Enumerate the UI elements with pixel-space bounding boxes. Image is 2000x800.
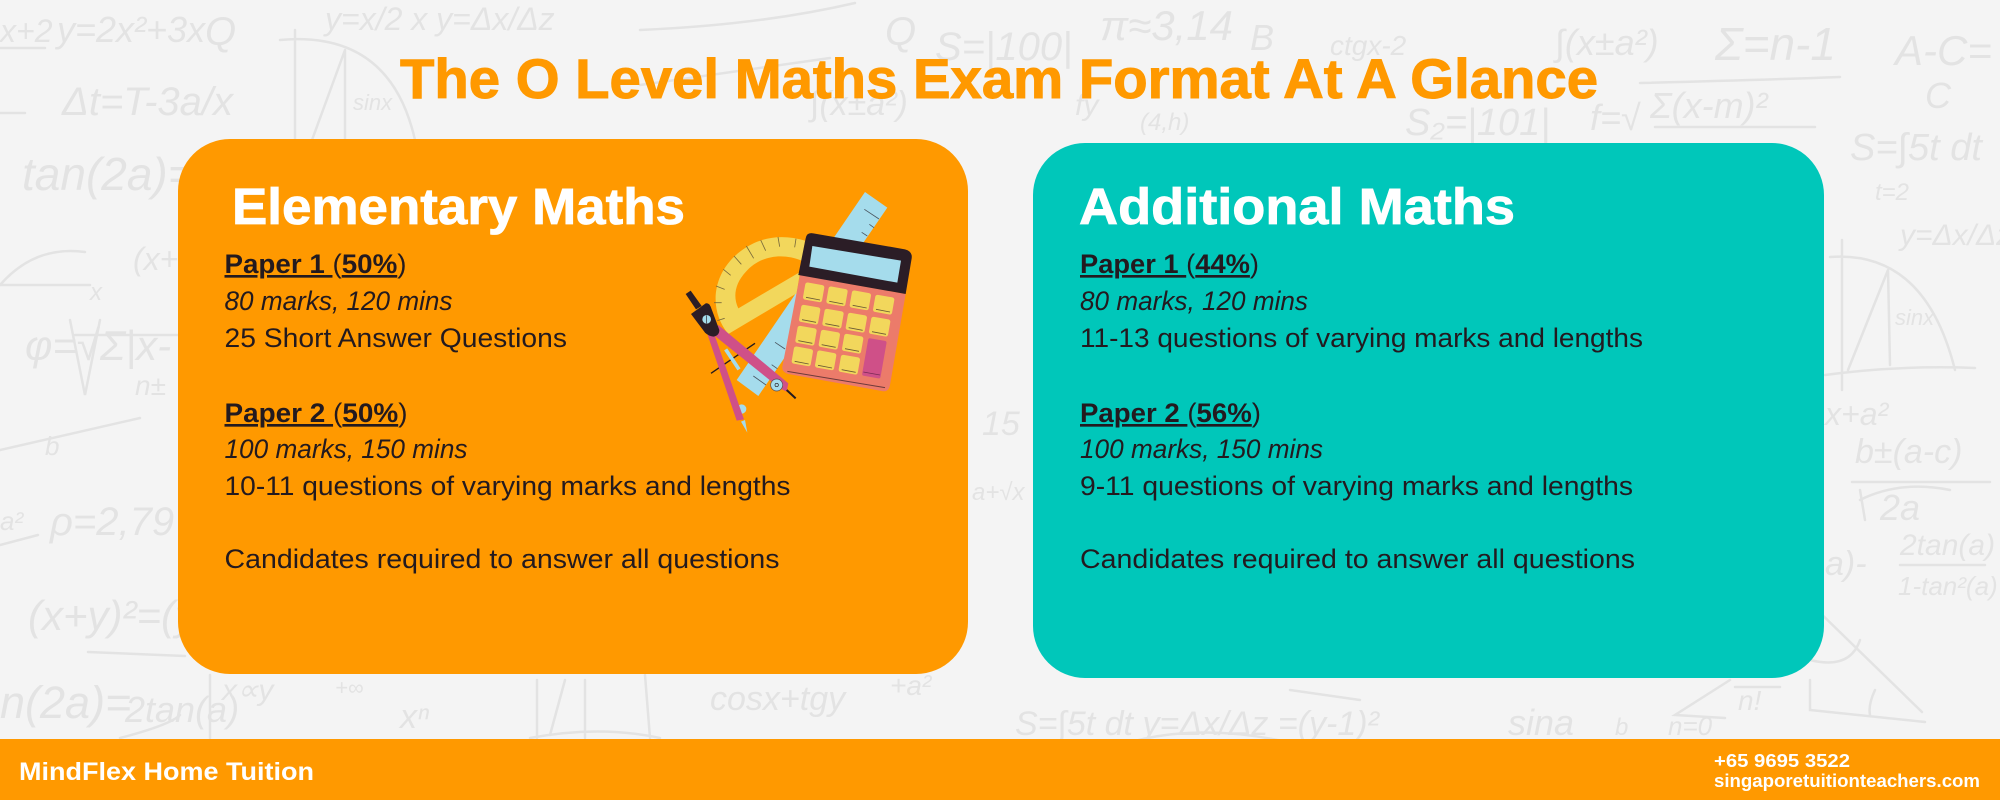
paper 1 details: 80 marks, 120 mins [1080, 286, 1308, 316]
footer website: singaporetuitionteachers.com [1714, 770, 1980, 791]
background math doodles: sina [1508, 702, 1574, 743]
background math doodles: n± [135, 370, 166, 401]
background math doodles: (4,h) [1140, 109, 1189, 136]
background math doodles: S=|100| [935, 25, 1073, 69]
background math doodles: n! [1738, 685, 1762, 716]
paper 2 details: 10-11 questions of varying marks and lengths [224, 471, 790, 501]
paper 1 details [224, 249, 567, 353]
background math doodles: A-C= [1892, 27, 1992, 74]
paper 2 details: 100 marks, 150 mins [1080, 434, 1323, 464]
footer bar [0, 739, 2000, 800]
background math doodles: +∞ [335, 675, 364, 700]
panel: additional maths [1033, 143, 1824, 678]
background math doodles: a)- [1825, 545, 1867, 583]
icon: compass [686, 291, 796, 433]
background math doodles: y=x/2 x y=Δx/Δz [323, 1, 555, 37]
background math doodles: Σ(x-m)² [1649, 85, 1770, 126]
background math doodles: π≈3,14 [1100, 2, 1233, 49]
background math doodles: S=∫5t dt [1850, 127, 1983, 169]
background math doodles: ctgx-2 [1330, 30, 1407, 61]
background math doodles: ∫(x±a²) [808, 85, 908, 123]
background math doodles: (x+y)²=(y/2 [28, 592, 231, 639]
background math doodles: 2tan(a) [124, 689, 239, 730]
background math doodles: sinx [353, 90, 393, 115]
background math doodles: B [1250, 17, 1274, 58]
paper 2 details: Paper 2 (50%) [224, 398, 408, 428]
heading: elementary maths: Elementary Maths [232, 178, 685, 235]
paper 2 details: Paper 2 (56%) [1080, 398, 1261, 428]
background math doodles: S₂=|101| [1405, 102, 1550, 144]
heading: additional maths: Additional Maths [1079, 178, 1515, 235]
background math doodles: Q [885, 10, 916, 54]
background math doodles: xⁿ [398, 698, 429, 736]
paper 2 details: 9-11 questions of varying marks and lengths [1080, 471, 1633, 501]
footer phone: +65 9695 3522 [1714, 750, 1850, 771]
background math doodles: Σ=n-1 [1714, 18, 1836, 70]
candidates note: Candidates required to answer all questions [1080, 544, 1635, 574]
background math doodles: (x+ [133, 241, 178, 277]
background math doodles: b±(a-c) [1855, 433, 1962, 471]
footer brand: MindFlex Home Tuition [19, 758, 314, 786]
paper 1 details: 80 marks, 120 mins [224, 286, 452, 316]
candidates note: Candidates required to answer all questions [224, 544, 780, 574]
icon: calculator [782, 233, 912, 391]
background math doodles: fy [1075, 89, 1100, 122]
paper 1 details: 25 Short Answer Questions [224, 323, 567, 353]
background math doodles: t=2 [1875, 179, 1909, 206]
background math doodles: n=0 [1668, 711, 1713, 741]
background math doodles: x+a² [1823, 396, 1889, 432]
paper 2 details: 100 marks, 150 mins [224, 434, 468, 464]
background math doodles: sinx [1895, 305, 1935, 330]
icon: protractor [714, 237, 805, 334]
background math doodles: 2a [1879, 487, 1920, 528]
background math doodles: +a² [890, 670, 933, 701]
title: The O Level Maths Exam Format At A Glance [400, 47, 1598, 110]
background math doodles: ∫(x±a²) [1553, 22, 1659, 63]
background math doodles: tan(2a)= [22, 148, 195, 200]
background math doodles: f=√ [1590, 97, 1641, 138]
background math doodles: cosx+tgy [710, 680, 847, 718]
background math doodles: φ=√Σ|x- [25, 322, 171, 370]
background math doodles: S=∫5t dt y=Δx/Δz =(y-1)² [1015, 705, 1381, 743]
paper 1 details [1080, 249, 1643, 353]
background math doodles: b [1615, 714, 1628, 741]
background math doodles: n(2a)= [0, 677, 131, 728]
background math doodles: Q [205, 10, 236, 54]
background math doodles: x [89, 279, 103, 306]
background math doodles: b [45, 431, 59, 461]
background math doodles: 2tan(a) [1899, 529, 1995, 562]
background math doodles: ρ=2,79 [49, 500, 174, 544]
background math doodles: a+√x [972, 479, 1026, 506]
background math doodles: 1-tan²(a) [1898, 571, 1998, 601]
paper 1 details: 11-13 questions of varying marks and lengths [1080, 323, 1643, 353]
background math doodles: x+2 [0, 13, 53, 49]
icon: calculator, protractor, ruler and compass [686, 192, 912, 433]
background math doodles: y=2x²+3x [54, 9, 207, 50]
paper 1 details: Paper 1 (50%) [224, 249, 406, 279]
background math doodles: 15 [982, 405, 1020, 443]
paper 2 details [1080, 398, 1633, 501]
background math doodles: x∝y [220, 674, 275, 707]
paper 2 details [224, 398, 790, 501]
background math doodles: a² [0, 506, 24, 536]
icon: ruler [737, 192, 887, 396]
background math doodles: C [1925, 75, 1952, 116]
panel: elementary maths [178, 139, 968, 674]
background math doodles: Δt=T-3a/x [61, 80, 235, 124]
paper 1 details: Paper 1 (44%) [1080, 249, 1259, 279]
